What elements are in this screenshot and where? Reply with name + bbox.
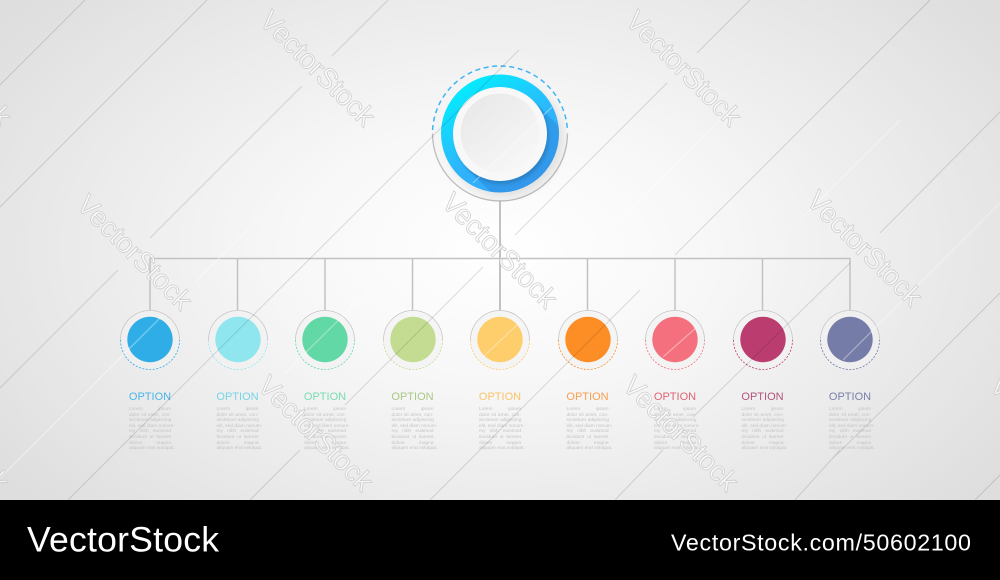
node 6: elit, sed diam nonum- (566, 424, 612, 429)
node 1 (120, 310, 180, 451)
node 4: sectetuer adipiscing (392, 418, 434, 423)
node 1: my nibh euismod (129, 429, 171, 434)
node 5: my nibh euismod (479, 429, 521, 434)
node 1: sectetuer adipiscing (129, 418, 171, 423)
node 4: OPTION (391, 391, 434, 403)
watermark overlay: diagonal lines and stamps: VectorStock (254, 5, 382, 133)
node 8: sectetuer adipiscing (742, 418, 784, 423)
node 3: OPTION (304, 391, 346, 403)
node 6: Lorem ipsum (566, 407, 608, 412)
watermark overlay: diagonal lines and stamps: VectorStock (71, 189, 199, 317)
node 2: OPTION (216, 391, 259, 403)
node 8: elit, sed diam nonum- (742, 424, 787, 429)
node 5: OPTION (479, 391, 521, 403)
node 7: Lorem ipsum (654, 407, 696, 412)
node 8: OPTION (741, 391, 784, 403)
node 4 (383, 310, 443, 451)
node 3: dolor sit amet, con- (304, 413, 346, 418)
node 8: aliquam erat volutpat. (742, 446, 787, 451)
node 1: dolore magna (129, 441, 171, 446)
node 5: sectetuer adipiscing (479, 418, 521, 423)
node 4: my nibh euismod (392, 429, 434, 434)
node 7: elit, sed diam nonum- (654, 424, 700, 429)
central hub circle (432, 65, 568, 202)
node 9: dolor sit amet, con- (829, 413, 871, 418)
watermark overlay: diagonal lines and stamps: VectorStock (801, 185, 929, 313)
hub outer ring (432, 66, 568, 201)
node 9: aliquam erat volutpat. (829, 446, 875, 451)
node 6 (558, 310, 618, 451)
node 3: tincidunt ut laoreet (304, 435, 346, 440)
node 9: sectetuer adipiscing (829, 418, 871, 423)
node 6: my nibh euismod (566, 429, 608, 434)
node 2 (208, 310, 268, 451)
node 5: dolor sit amet, con- (479, 413, 521, 418)
node 3: dolore magna (304, 441, 346, 446)
node 5: aliquam erat volutpat. (479, 446, 525, 451)
node 5 (470, 310, 530, 451)
node 9: dolore magna (829, 441, 871, 446)
node 3: aliquam erat volutpat. (304, 446, 350, 451)
node 4: elit, sed diam nonum- (392, 424, 437, 429)
node 7: OPTION (654, 391, 696, 403)
node 6: OPTION (566, 391, 609, 403)
hub ring shadow (441, 75, 569, 203)
watermark overlay: diagonal lines and stamps: VectorStock (617, 370, 745, 498)
node 6: sectetuer adipiscing (566, 418, 609, 423)
node 4: Lorem ipsum (392, 407, 434, 412)
node 4: aliquam erat volutpat. (392, 446, 437, 451)
node 5: dolore magna (479, 441, 521, 446)
node 5: elit, sed diam nonum- (479, 424, 525, 429)
node 7: tincidunt ut laoreet (654, 435, 696, 440)
node 2: dolor sit amet, con- (216, 413, 258, 418)
node 3: Lorem ipsum (304, 407, 346, 412)
node 8: dolore magna (742, 441, 784, 446)
node 8: Lorem ipsum (742, 407, 784, 412)
node 8: dolor sit amet, con- (742, 413, 784, 418)
watermark overlay: diagonal lines and stamps: VectorStock (436, 187, 564, 315)
node 7: sectetuer adipiscing (654, 418, 696, 423)
node 9 (820, 310, 880, 451)
node 2: elit, sed diam nonum- (216, 424, 262, 429)
node 7: dolor sit amet, con- (654, 413, 696, 418)
node 5: Lorem ipsum (479, 407, 521, 412)
node 1: aliquam erat volutpat. (129, 446, 175, 451)
node 2: Lorem ipsum (216, 407, 258, 412)
footer logo: VectorStock (27, 520, 219, 560)
node 9: elit, sed diam nonum- (829, 424, 875, 429)
node 2: sectetuer adipiscing (216, 418, 259, 423)
hub blue ring (441, 74, 559, 192)
watermark overlay: diagonal lines and stamps: VectorStock (252, 370, 380, 498)
node 3 (295, 310, 355, 451)
node 9: tincidunt ut laoreet (829, 435, 871, 440)
node 6: aliquam erat volutpat. (566, 446, 612, 451)
node 2: aliquam erat volutpat. (216, 446, 262, 451)
node 1: dolor sit amet, con- (129, 413, 171, 418)
node 2: my nibh euismod (216, 429, 258, 434)
node 1: tincidunt ut laoreet (129, 435, 171, 440)
node 9: Lorem ipsum (829, 407, 871, 412)
node 3: sectetuer adipiscing (304, 418, 346, 423)
watermark overlay: diagonal lines and stamps: VectorStock (620, 5, 748, 133)
node 1: OPTION (129, 391, 171, 403)
node 7: dolore magna (654, 441, 696, 446)
hub white disk (453, 87, 549, 184)
node 6: tincidunt ut laoreet (566, 435, 608, 440)
node 1: Lorem ipsum (129, 407, 171, 412)
node 3: elit, sed diam nonum- (304, 424, 350, 429)
node 7: aliquam erat volutpat. (654, 446, 700, 451)
node 8 (733, 310, 793, 451)
node 1: elit, sed diam nonum- (129, 424, 175, 429)
node 2: tincidunt ut laoreet (216, 435, 258, 440)
node 7: my nibh euismod (654, 429, 696, 434)
node 2: dolore magna (216, 441, 258, 446)
node 4: tincidunt ut laoreet (392, 435, 434, 440)
node 8: tincidunt ut laoreet (742, 435, 784, 440)
node 9: OPTION (829, 391, 871, 403)
node 6: dolor sit amet, con- (566, 413, 608, 418)
node 7 (645, 310, 705, 451)
node 3: my nibh euismod (304, 429, 346, 434)
node 8: my nibh euismod (742, 429, 784, 434)
footer image id: VectorStock.com/50602100 (671, 530, 971, 556)
node 4: dolore magna (392, 441, 434, 446)
node 6: dolore magna (566, 441, 608, 446)
node 5: tincidunt ut laoreet (479, 435, 521, 440)
node 9: my nibh euismod (829, 429, 871, 434)
node 4: dolor sit amet, con- (392, 413, 434, 418)
